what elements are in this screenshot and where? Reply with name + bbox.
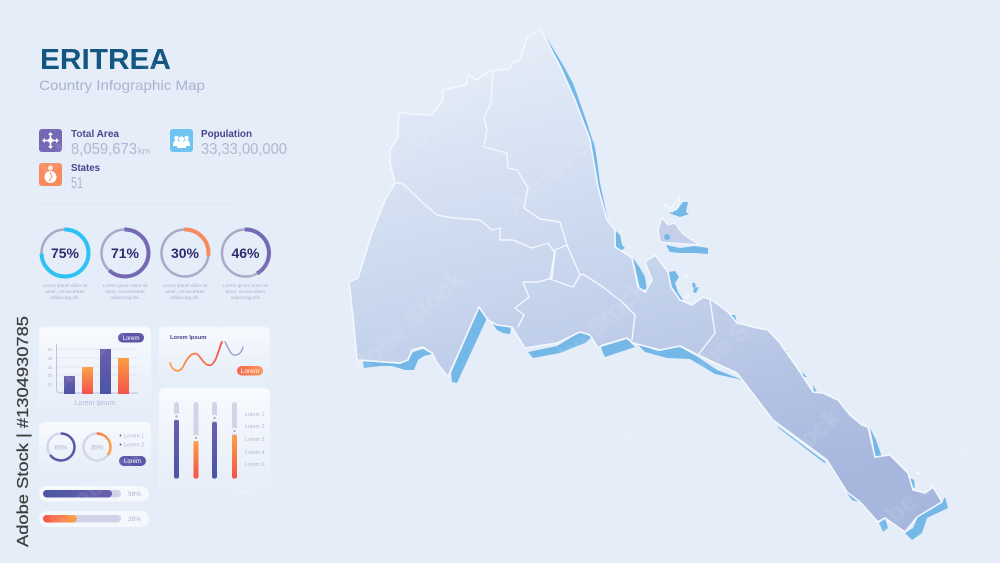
donut: 30% [162,230,208,300]
panel: bar chart: 40 [48,356,53,361]
donut: 30%: 30% [171,245,200,261]
infographic canvas: Adobe Stock [205,199,343,328]
donut: 71%: adipiscing elit. [110,295,140,300]
infographic canvas: Adobe Stock [375,419,513,548]
donut: 71% [102,230,148,300]
slider labels: Lorem 1 [245,412,264,418]
infographic canvas: Adobe Stock [162,86,300,215]
donut: 71%: Lorem ipsum dolor sit [103,283,148,288]
small donut 35%: 35% [90,444,104,452]
slider 2 [193,402,199,478]
donut: 30%: Lorem ipsum dolor sit [163,283,208,288]
map islands [658,195,920,475]
pill button: Lorem [241,368,259,375]
legend [120,434,144,448]
slider labels: Lorem 2 [245,424,264,430]
stat: states [39,162,100,192]
subtitle: Country Infographic Map [39,77,205,93]
infographic canvas: Adobe Stock [505,419,643,548]
donut: 71%: 71% [111,245,140,261]
donut: 46% [222,230,269,300]
panel: bar chart: 20 [48,373,53,378]
slider 3 [211,402,218,478]
infographic canvas: Adobe Stock [40,409,178,538]
pill button: Lorem [122,336,140,342]
infographic canvas: Adobe Stock [500,92,638,221]
donut: 30%: adipiscing elit. [170,295,200,300]
stat: total area: Total Area [71,128,119,140]
infographic canvas: Adobe Stock [708,402,846,531]
icon: arrows [39,129,62,152]
panel: sliders [159,388,270,492]
infographic canvas: Adobe Stock [842,434,980,563]
bars [64,349,129,394]
map water shadows [363,37,948,540]
legend: Lorem 2 [124,442,144,448]
panel: line chart: Lorem Ipsum [170,335,206,341]
donut: 71%: amet, consectetuer [105,289,145,294]
stat: total area: km [138,146,150,156]
stat: total area [39,128,150,158]
donut: 30%: amet, consectetuer [165,289,205,294]
panel: bar chart: 30 [48,365,53,370]
infographic canvas: Adobe Stock [697,54,835,183]
stat: states: States [71,162,100,174]
slider labels: Lorem 5 [245,462,264,468]
slider labels [245,412,264,468]
pill button: Lorem [124,459,141,465]
wave line [170,342,222,371]
slider 4 [231,402,238,478]
donut: 46%: adipiscing elit. [231,295,260,300]
panel: bar chart: 50 [48,347,53,352]
donut: 75%: Lorem ipsum dolor sit [43,283,88,288]
infographic canvas: Adobe Stock [825,119,963,248]
infographic canvas: Adobe Stock [365,59,503,188]
icon: pin map [39,163,62,186]
legend: Lorem 1 [124,434,144,440]
vertical stock id text: Adobe Stock | #1304930785 [15,316,32,547]
progress bar 35% [39,511,149,527]
small donut 65%: 65% [54,444,68,452]
stat: total area: 8,059,673 [71,141,137,158]
stat: states: 51 [71,175,83,192]
infographic canvas: Adobe Stock [30,54,168,183]
donut: 46%: amet, consectetuer [226,289,266,294]
icon: people [170,129,193,152]
progress bar 98% [39,486,149,502]
donut: 46%: Lorem ipsum dolor sit [223,283,269,288]
donut: 46%: 46% [231,245,260,261]
slider 1 [173,402,180,478]
stat: population [170,128,287,158]
title: ERITREA [40,44,171,76]
map state borders [395,70,715,355]
panel: line chart [159,327,270,381]
infographic canvas: Adobe Stock [515,274,653,403]
infographic canvas: Adobe Stock [15,294,153,423]
panel: bar chart: Lorem Ipsum [75,400,116,407]
map country fill [349,29,942,532]
stat: population: Population [201,128,252,140]
slider labels: Lorem 3 [245,437,264,443]
donut: 75%: adipiscing elit. [50,295,80,300]
panel: donuts [39,422,151,472]
progress bar 98%: 98% [128,491,141,498]
donut: 75%: 75% [51,245,80,261]
donut: 75%: amet, consectetuer [45,289,85,294]
map: Eritrea [349,29,948,540]
infographic canvas: Adobe Stock [332,264,470,393]
stat: population: 33,33,00,000 [201,141,287,158]
infographic canvas: Adobe Stock [657,279,795,408]
panel: bar chart [39,327,151,412]
progress bar 35%: 35% [128,516,141,523]
slider labels: Lorem 4 [245,450,264,456]
panel: bar chart: 10 [48,382,53,387]
donut: 75% [42,230,88,300]
